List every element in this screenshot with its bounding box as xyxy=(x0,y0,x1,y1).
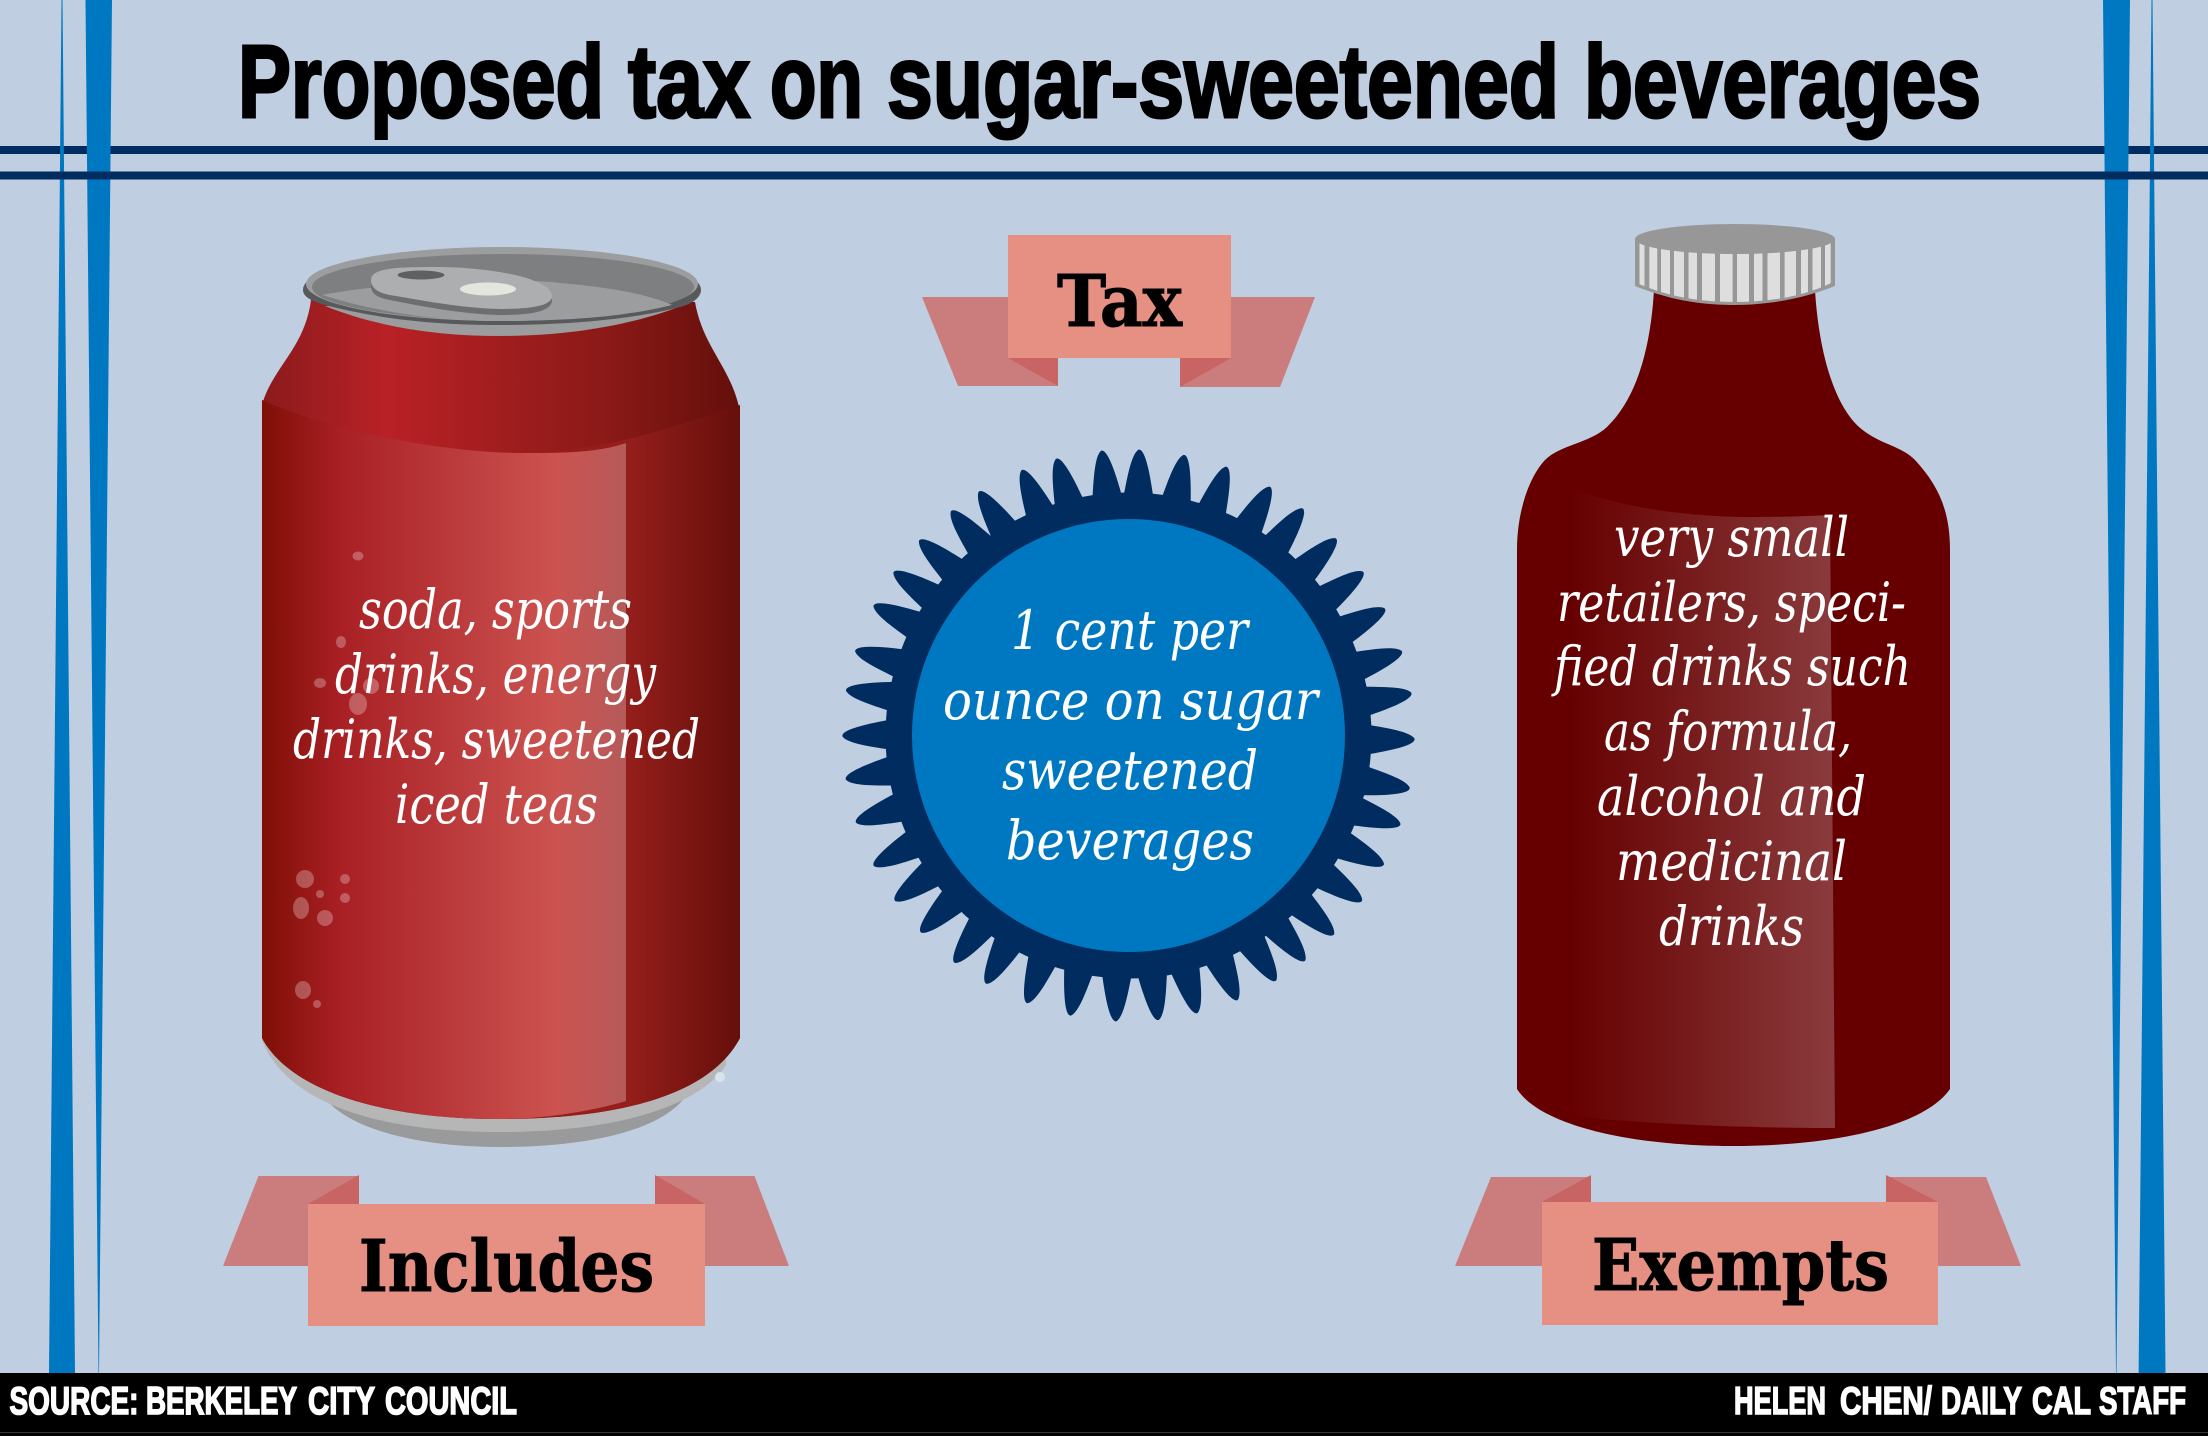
banner: tax: Tax xyxy=(1057,259,1183,343)
lid light rim xyxy=(306,247,698,321)
bottle text: fied drinks such xyxy=(1551,635,1911,698)
badge navy ring xyxy=(886,492,1372,978)
banner: exempts: Exempts xyxy=(1592,1223,1889,1307)
bottle text: medicinal xyxy=(1616,830,1847,893)
badge blue disc xyxy=(912,519,1345,952)
title: beverages xyxy=(1584,24,1981,139)
lid light panel xyxy=(322,281,672,321)
right decorative stripes xyxy=(2103,0,2166,1373)
title: tax xyxy=(628,24,750,139)
footer bar xyxy=(0,1373,2208,1436)
banner: exempts xyxy=(1455,1175,2021,1325)
can body right side xyxy=(262,400,740,1119)
badge text: sweetened xyxy=(1002,739,1258,802)
bottle text: as formula, xyxy=(1604,700,1852,763)
staff credit: HELEN xyxy=(1734,1380,1826,1423)
lid dark rim xyxy=(303,252,701,325)
can shoulder xyxy=(262,300,740,1119)
banner: includes xyxy=(223,1175,789,1326)
can text: soda, sports xyxy=(359,578,632,641)
first header rule xyxy=(0,146,2208,154)
source credit: COUNCIL xyxy=(385,1380,517,1423)
source credit: SOURCE: xyxy=(10,1380,138,1423)
title: sugar-sweetened xyxy=(887,24,1559,139)
droplet xyxy=(715,1072,725,1082)
can base: dark metal xyxy=(325,1093,688,1147)
can text: drinks, sweetened xyxy=(293,708,700,771)
bottle text xyxy=(1551,506,1911,958)
source credit xyxy=(10,1380,517,1423)
can text: iced teas xyxy=(395,773,598,836)
bottle highlight xyxy=(1517,477,1835,1128)
title: on xyxy=(770,24,863,139)
bottle text: alcohol and xyxy=(1597,765,1866,828)
bottle illustration xyxy=(1517,224,1950,1146)
title xyxy=(238,24,1981,139)
soda can illustration xyxy=(262,247,740,1147)
bottle text: drinks xyxy=(1659,895,1804,958)
staff credit: CAL xyxy=(2032,1380,2091,1423)
badge spikes xyxy=(842,449,1415,1022)
badge text: 1 cent per xyxy=(1011,599,1251,662)
badge text: beverages xyxy=(1006,809,1254,872)
bottle cap xyxy=(1635,224,1835,308)
staff credit: CHEN/ xyxy=(1840,1380,1932,1423)
tab hole xyxy=(398,270,444,280)
staff credit xyxy=(1734,1380,2186,1423)
bubbles xyxy=(293,552,379,1008)
tax badge xyxy=(842,449,1415,1022)
source credit: CITY xyxy=(308,1380,375,1423)
banner: tax xyxy=(922,235,1315,387)
source credit: BERKELEY xyxy=(146,1380,297,1423)
tab rivet xyxy=(460,282,516,296)
badge text xyxy=(943,599,1321,872)
can base: light metal xyxy=(262,1040,726,1132)
title: Proposed xyxy=(238,24,604,139)
bottle body xyxy=(1517,290,1950,1146)
can text: drinks, energy xyxy=(335,643,657,706)
lid inner xyxy=(312,254,694,320)
lid lower lip xyxy=(325,306,681,336)
can highlight band xyxy=(262,400,626,1119)
tab shadow xyxy=(371,273,552,315)
second header rule xyxy=(0,172,2208,180)
tab xyxy=(371,267,552,309)
bottle text: very small xyxy=(1614,506,1849,569)
staff credit: DAILY xyxy=(1941,1380,2022,1423)
bottle text: retailers, speci- xyxy=(1557,571,1906,634)
left decorative stripes xyxy=(49,0,112,1373)
banner: includes: Includes xyxy=(359,1224,654,1308)
can text xyxy=(293,578,700,836)
badge text: ounce on sugar xyxy=(943,669,1321,732)
